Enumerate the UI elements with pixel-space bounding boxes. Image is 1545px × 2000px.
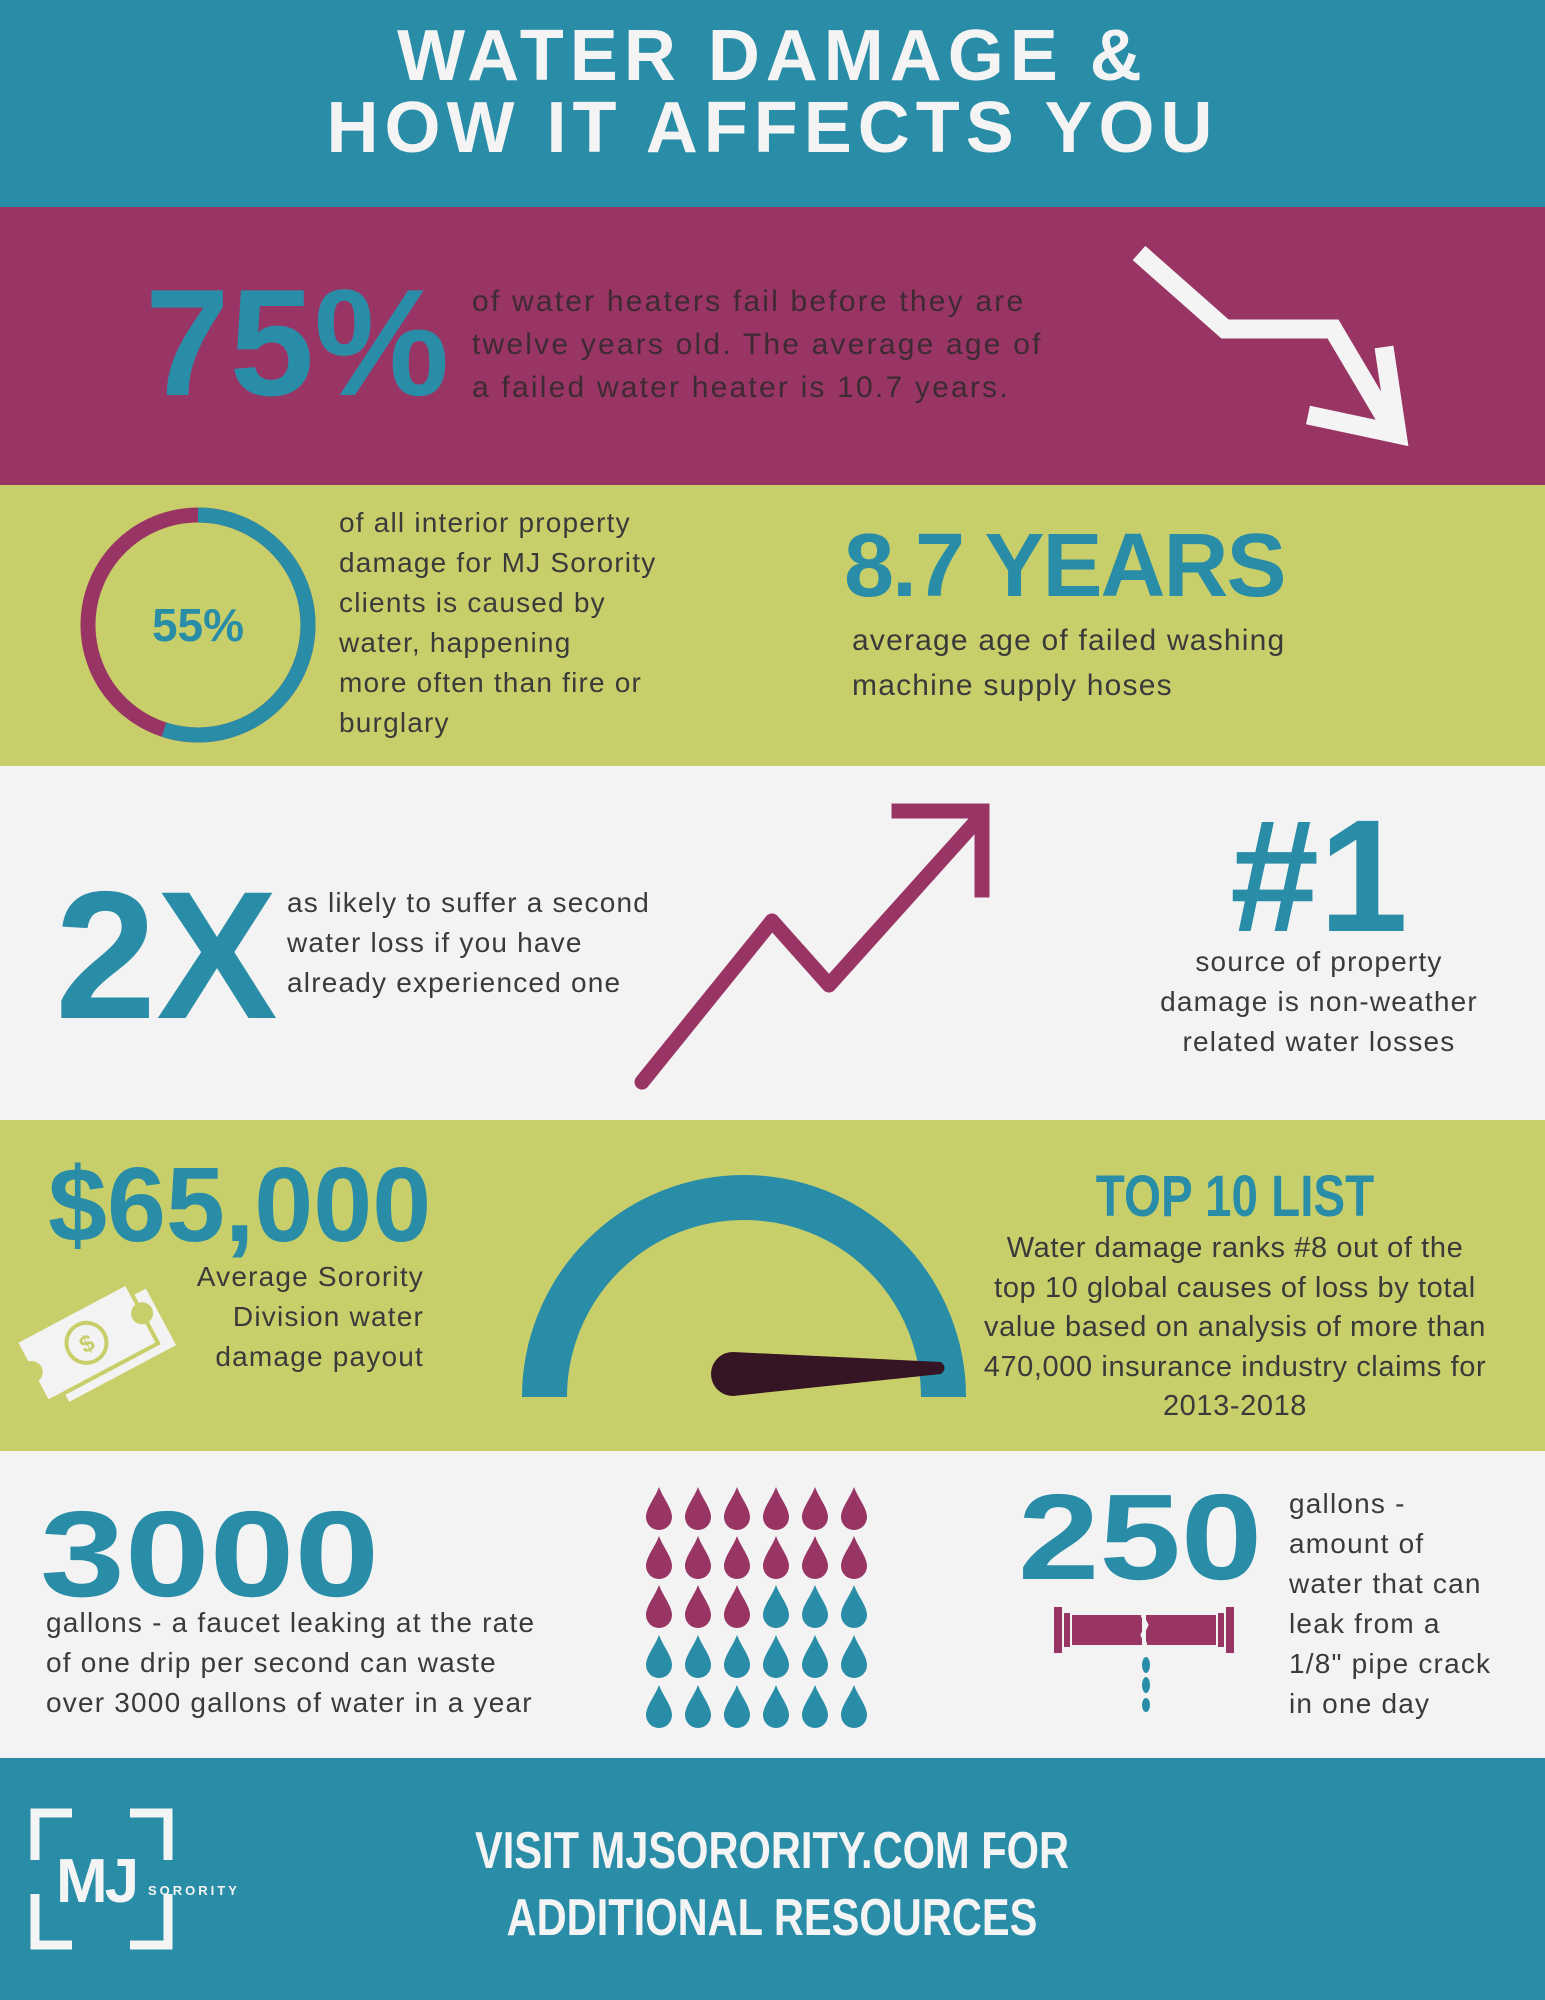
text: second loss [287, 887, 650, 998]
text: interior damage: of all interior property [339, 507, 631, 538]
text: water heaters: twelve years old. The average age of [472, 328, 1043, 361]
call to action [475, 1822, 1069, 1947]
text: top 10: 470,000 insurance industry claims for [984, 1350, 1486, 1382]
arrow: down trend [1132, 246, 1408, 446]
header band [0, 0, 1545, 207]
panel: 55% and 8.7 years [0, 485, 1545, 766]
title: WATER DAMAGE & [397, 16, 1148, 96]
text: pipe crack: 1/8" pipe crack [1289, 1648, 1491, 1679]
title [326, 16, 1218, 168]
arrow: up trend [634, 804, 990, 1090]
text: payout: Division water [233, 1301, 424, 1332]
text: interior damage: water, happening [339, 627, 571, 658]
text: water heaters: of water heaters fail before they are [472, 285, 1025, 318]
logo: MJ Sorority [30, 1808, 240, 1950]
text: payout [196, 1261, 424, 1372]
text: pipe crack: in one day [1289, 1688, 1430, 1719]
text: interior damage: damage for MJ Sorority [339, 547, 656, 578]
text: payout: Average Sorority [197, 1261, 424, 1292]
text: washing machine [852, 624, 1285, 702]
text: source of damage [1160, 946, 1478, 1057]
text: source of damage: damage is non-weather [1160, 986, 1478, 1017]
text: faucet: over 3000 gallons of water in a year [46, 1687, 533, 1718]
call to action: ADDITIONAL RESOURCES [507, 1889, 1037, 1947]
stat 250: 250 [1018, 1469, 1262, 1605]
text: pipe crack: leak from a [1289, 1608, 1441, 1639]
text: top 10: 2013-2018 [1163, 1390, 1307, 1422]
stat 2X: 2X [55, 853, 278, 1057]
stat 8.7 years: 8.7 YEARS [844, 516, 1285, 616]
text: washing machine: average age of failed washing [852, 624, 1285, 657]
chart: gauge [522, 1175, 966, 1397]
text: faucet: gallons - a faucet leaking at the rate [46, 1607, 535, 1638]
title: HOW IT AFFECTS YOU [326, 88, 1218, 168]
icon: money [18, 1286, 176, 1402]
footer [0, 1758, 1545, 2000]
stat 3000: 3000 [40, 1486, 379, 1622]
text: top 10: Water damage ranks #8 out of the [1007, 1232, 1463, 1264]
text: water heaters: a failed water heater is 10.7 years. [472, 371, 1010, 404]
text: faucet [46, 1607, 535, 1718]
text: second loss: already experienced one [287, 967, 621, 998]
text: second loss: water loss if you have [287, 927, 583, 958]
text: interior damage [339, 507, 656, 738]
panel: 2X and #1 [0, 766, 1545, 1120]
text: source of damage: source of property [1195, 946, 1443, 977]
stat 75%: 75% [145, 258, 449, 428]
icon: money: $ [75, 1329, 100, 1359]
heading: top 10 list: TOP 10 LIST [1096, 1164, 1374, 1229]
call to action: VISIT MJSORORITY.COM FOR [475, 1822, 1069, 1880]
logo: MJ Sorority: MJ [56, 1847, 136, 1916]
donut chart 55% [80, 508, 316, 742]
icon grid: drops [646, 1487, 867, 1728]
panel: gallons [0, 1451, 1545, 1758]
text: washing machine: machine supply hoses [852, 669, 1173, 702]
stat $65,000: $65,000 [48, 1146, 431, 1264]
text: pipe crack: amount of [1289, 1528, 1424, 1559]
text: second loss: as likely to suffer a second [287, 887, 650, 918]
text: source of damage: related water losses [1182, 1026, 1456, 1057]
text: water heaters [472, 285, 1043, 404]
panel: water heaters [0, 207, 1545, 485]
text: interior damage: burglary [339, 707, 450, 738]
text: pipe crack [1289, 1488, 1491, 1719]
text: payout: damage payout [215, 1341, 424, 1372]
text: pipe crack: water that can [1289, 1568, 1482, 1599]
stat #1: #1 [1230, 786, 1408, 965]
logo: MJ Sorority: SORORITY [148, 1883, 240, 1898]
text: interior damage: more often than fire or [339, 667, 642, 698]
text: top 10: value based on analysis of more than [984, 1311, 1486, 1343]
text: pipe crack: gallons - [1289, 1488, 1406, 1519]
text: top 10 [984, 1232, 1486, 1422]
panel: payout and top 10 [0, 1120, 1545, 1451]
donut chart 55%: 55% [152, 599, 244, 651]
text: interior damage: clients is caused by [339, 587, 606, 618]
icon: cracked pipe [1054, 1607, 1234, 1712]
text: top 10: top 10 global causes of loss by total [994, 1272, 1476, 1304]
text: faucet: of one drip per second can waste [46, 1647, 497, 1678]
